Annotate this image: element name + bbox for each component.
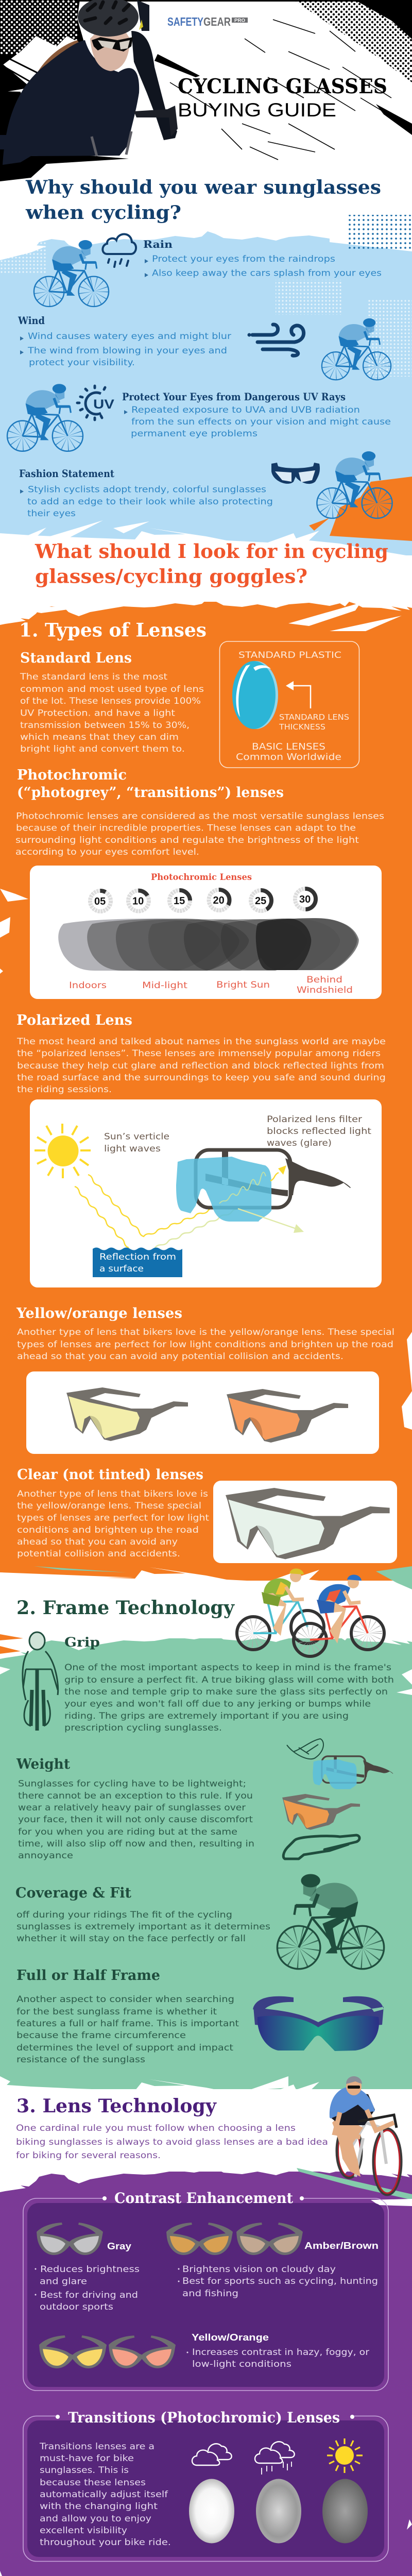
panel: transitions photochromic lenses: Transitions (Photochromic) Lenses bbox=[68, 2409, 340, 2426]
rain item: Rain bbox=[143, 238, 173, 250]
clear lens text: types of lenses are perfect for low light bbox=[17, 1513, 210, 1523]
coverage and fit bbox=[15, 1874, 384, 1969]
clear lens text: conditions and brighten up the road bbox=[17, 1525, 199, 1535]
panel: photochromic lenses chart: Photochromic Lenses bbox=[151, 872, 252, 883]
full or half frame: features a full or half frame. This is important bbox=[16, 2019, 239, 2028]
coverage and fit: Coverage & Fit bbox=[15, 1885, 132, 1901]
yellow/orange lens text: Another type of lens that bikers love is the yellow/orange lens. These special bbox=[17, 1327, 394, 1337]
logo: Safety Gear Pro: PRO bbox=[234, 18, 245, 23]
full or half frame: for the best sunglass frame is whether it bbox=[16, 2007, 217, 2016]
title: CYCLING GLASSES bbox=[178, 75, 387, 98]
panel: polarized lens diagram: Polarized lens filter bbox=[267, 1114, 362, 1124]
title bbox=[178, 75, 387, 121]
panel: contrast enhancement: Best for sports such as cycling, hunting bbox=[182, 2276, 378, 2286]
yellow/orange lens text bbox=[16, 1306, 394, 1361]
photochromic text: surrounding light conditions and regulate the brightness of the light bbox=[15, 835, 359, 845]
weight text: your face, then it will not only cause discomfort bbox=[18, 1815, 253, 1824]
polarized lens text: Polarized Lens bbox=[16, 1012, 132, 1028]
illustration: two cartoon cyclists bbox=[237, 1568, 384, 1656]
dial row: exposure seconds: 10 bbox=[132, 896, 144, 907]
coverage and fit: sunglasses is extremely important as it determines bbox=[16, 1922, 270, 1931]
panel: green frame section background bbox=[0, 1615, 412, 2089]
heading: what to look for bbox=[35, 540, 388, 587]
photochromic text: Photochromic lenses are considered as the most versatile sunglass lenses bbox=[16, 811, 384, 821]
panel: yellow and orange glasses bbox=[26, 1371, 379, 1454]
full or half frame: Another aspect to consider when searching bbox=[16, 1994, 234, 2004]
heading: why wear sunglasses bbox=[25, 177, 381, 224]
dial row: exposure seconds bbox=[90, 889, 316, 911]
white band under blue section bbox=[0, 520, 412, 611]
section heading: lens technology: 3. Lens Technology bbox=[16, 2095, 217, 2117]
heading: what to look for: glasses/cycling goggles? bbox=[35, 565, 307, 587]
wind item: Wind causes watery eyes and might blur bbox=[28, 331, 231, 341]
logo: Safety Gear Pro: GEAR bbox=[203, 15, 231, 28]
goggles illustration bbox=[176, 1150, 351, 1222]
panel: polarized lens diagram bbox=[30, 1099, 382, 1287]
rain item: Protect your eyes from the raindrops bbox=[152, 254, 335, 264]
wind item: The wind from blowing in your eyes and bbox=[27, 346, 227, 355]
section heading: lens technology: biking sunglasses is always to avoid glass lenses are a bad idea bbox=[16, 2137, 328, 2147]
panel: contrast enhancement: Yellow/Orange bbox=[192, 2332, 269, 2343]
section heading: frame technology: 2. Frame Technology bbox=[16, 1597, 235, 1619]
weight text: annoyance bbox=[18, 1851, 73, 1860]
polarized lens text bbox=[16, 1012, 386, 1094]
standard lens text: bright light and convert them to. bbox=[20, 744, 185, 754]
weight text: wear a relatively heavy pair of sunglasses over bbox=[18, 1803, 246, 1812]
panel: polarized lens diagram: light waves bbox=[104, 1144, 161, 1154]
icon: reflection surface: Reflection from bbox=[99, 1252, 176, 1262]
dial row: exposure seconds: 05 bbox=[94, 896, 106, 907]
overlapping lens tints bbox=[58, 918, 359, 971]
fashion statement item bbox=[19, 451, 412, 541]
clear lens text: the yellow/orange lens. These special bbox=[17, 1501, 201, 1511]
weight text: there cannot be an exception to this rule. If you bbox=[18, 1791, 253, 1801]
panel: contrast enhancement: and glare bbox=[40, 2277, 87, 2286]
bike: teal frame bbox=[237, 1601, 324, 1650]
UV protection item: Repeated exposure to UVA and UVB radiation bbox=[131, 405, 360, 415]
section heading: types of lenses: 1. Types of Lenses bbox=[19, 619, 207, 641]
yellow/orange lens text: Yellow/orange lenses bbox=[16, 1306, 182, 1321]
yellow/orange lens text: types of lenses are perfect for low light conditions and brighten up the road bbox=[17, 1340, 393, 1349]
panel: orange lens section background bbox=[0, 581, 412, 1581]
panel: polarized lens diagram: waves (glare) bbox=[267, 1138, 332, 1148]
grip text and icon: prescription cycling sunglasses. bbox=[64, 1723, 222, 1733]
illustration: cyclist in blue jersey bbox=[330, 2076, 401, 2195]
clear lens text: Another type of lens that bikers love is bbox=[17, 1489, 208, 1499]
heading: why wear sunglasses: Why should you wear sunglasses bbox=[25, 177, 381, 198]
fashion statement item: their eyes bbox=[27, 509, 76, 518]
panel: transitions photochromic lenses: sunglasses. This is bbox=[40, 2465, 129, 2475]
standard plastic lens diagram: BASIC LENSES bbox=[252, 741, 325, 752]
panel: photochromic lenses chart: Behind bbox=[306, 975, 342, 985]
dial row: exposure seconds: 25 bbox=[255, 895, 266, 907]
lens tint samples bbox=[189, 2479, 234, 2543]
standard lens text: common and most used type of lens bbox=[20, 684, 204, 694]
heading: what to look for: What should I look for in cycling bbox=[35, 540, 388, 563]
hero background grunge bbox=[0, 0, 412, 181]
icon: reflection surface bbox=[93, 1248, 182, 1277]
dial row: exposure seconds: 20 bbox=[213, 895, 225, 906]
grip text and icon: your eyes and won't fall off due to any jerking or bumps while bbox=[64, 1699, 371, 1709]
icon: gradient sunglasses bbox=[253, 1996, 384, 2051]
fashion statement item: Fashion Statement bbox=[19, 467, 115, 480]
panel: contrast enhancement: Brightens vision on cloudy day bbox=[182, 2264, 336, 2274]
panel: contrast enhancement: Gray bbox=[107, 2241, 131, 2251]
panel: clear lens glasses bbox=[213, 1481, 397, 1563]
dial row: exposure seconds: 30 bbox=[299, 894, 311, 905]
panel: transitions photochromic lenses: excellent visibility bbox=[40, 2526, 127, 2535]
hero photo: cyclist riders bbox=[0, 0, 178, 165]
title: BUYING GUIDE bbox=[178, 99, 336, 121]
standard lens text: The standard lens is the most bbox=[20, 672, 168, 682]
wind item bbox=[18, 314, 391, 380]
weight text: time, will also slip off now and then, resulting in bbox=[18, 1839, 254, 1849]
dial row: exposure seconds: 15 bbox=[174, 895, 185, 907]
grip text and icon: the nose and temple grip to make sure the glass sits perfectly on bbox=[64, 1687, 388, 1697]
icons: feather, blue goggles, orange glasses, hand bbox=[282, 1739, 393, 1859]
section heading: lens technology: One cardinal rule you must follow when choosing a lens bbox=[16, 2123, 296, 2133]
weight text: for you when you are riding but at the same bbox=[18, 1827, 237, 1837]
heading: why wear sunglasses: when cycling? bbox=[25, 202, 181, 224]
panel: transitions photochromic lenses: must-have for bike bbox=[40, 2453, 134, 2463]
panel: photochromic lenses chart: Windshield bbox=[297, 985, 353, 995]
grip text and icon: Grip bbox=[64, 1635, 100, 1650]
standard lens text: transmission between 15% to 30%, bbox=[20, 720, 190, 730]
panel: contrast enhancement bbox=[23, 2190, 388, 2391]
grip text and icon: grip to ensure a perfect fit. A true biking glass will come with both bbox=[64, 1675, 394, 1685]
panel: contrast enhancement: Reduces brightness bbox=[40, 2264, 140, 2274]
weight text bbox=[16, 1756, 254, 1860]
panel: photochromic lenses chart: Bright Sun bbox=[216, 980, 270, 990]
full or half frame: Full or Half Frame bbox=[16, 1968, 160, 1984]
clear lens text: Clear (not tinted) lenses bbox=[17, 1467, 203, 1483]
white band under green section bbox=[0, 2076, 412, 2179]
standard lens text: of the lot. These lenses provide 100% bbox=[20, 696, 201, 706]
full or half frame: determines the level of support and impact bbox=[16, 2043, 234, 2053]
clear lens text: ahead so that you can avoid any bbox=[17, 1537, 178, 1547]
polarized lens text: The most heard and talked about names in the sunglass world are maybe bbox=[16, 1037, 386, 1046]
full or half frame bbox=[16, 1968, 384, 2064]
panel: transitions photochromic lenses: with the changing light bbox=[40, 2501, 158, 2511]
UV protection item bbox=[7, 384, 391, 451]
UV protection item: Protect Your Eyes from Dangerous UV Rays bbox=[122, 391, 346, 403]
standard plastic lens diagram: Common Worldwide bbox=[236, 752, 341, 762]
panel: contrast enhancement: Amber/Brown bbox=[304, 2241, 379, 2251]
standard plastic lens diagram: THICKNESS bbox=[279, 722, 325, 732]
rain item: Also keep away the cars splash from your eyes bbox=[152, 268, 382, 278]
standard plastic lens diagram: STANDARD PLASTIC bbox=[238, 650, 341, 660]
panel: contrast enhancement: outdoor sports bbox=[40, 2302, 113, 2312]
panel: polarized lens diagram: Sun’s verticle bbox=[104, 1131, 169, 1142]
grip text and icon bbox=[23, 1632, 394, 1733]
UV protection item: UV bbox=[93, 397, 114, 412]
weight text: Sunglasses for cycling have to be lightweight; bbox=[18, 1778, 246, 1789]
polarized lens text: because they help cut glare and reflection and block reflected lights from bbox=[17, 1061, 384, 1071]
weight text: Weight bbox=[16, 1756, 71, 1772]
panel: photochromic lenses chart bbox=[30, 866, 382, 999]
panel: transitions photochromic lenses bbox=[23, 2409, 388, 2562]
white band under orange section bbox=[0, 1566, 412, 1653]
icon: sun bbox=[35, 1124, 91, 1178]
panel: contrast enhancement: Contrast Enhancement bbox=[114, 2190, 293, 2207]
polarized lens text: the “polarized lenses”. These lenses are immensely popular among riders bbox=[17, 1048, 381, 1058]
bike: red frame bbox=[294, 1606, 384, 1656]
lens swatches bbox=[37, 2223, 303, 2368]
logo: Safety Gear Pro: SAFETY bbox=[167, 15, 203, 28]
light waves bbox=[75, 1175, 238, 1248]
panel: contrast enhancement: Increases contrast in hazy, foggy, or bbox=[192, 2347, 369, 2357]
panel: transitions photochromic lenses: Transitions lenses are a bbox=[39, 2442, 154, 2451]
standard lens text bbox=[20, 650, 204, 754]
panel: transitions photochromic lenses: and allow you to enjoy bbox=[40, 2514, 151, 2523]
clear lens text: potential collision and accidents. bbox=[17, 1549, 180, 1558]
fashion statement item: Stylish cyclists adopt trendy, colorful sunglasses bbox=[28, 484, 266, 495]
weather icons bbox=[192, 2442, 295, 2475]
logo: Safety Gear Pro bbox=[167, 15, 248, 28]
grip text and icon: One of the most important aspects to keep in mind is the frame's bbox=[64, 1663, 391, 1672]
section heading: lens technology: for biking for several reasons. bbox=[16, 2150, 161, 2160]
panel: photochromic lenses chart: Indoors bbox=[69, 980, 107, 990]
photochromic text: (“photogrey”, “transitions”) lenses bbox=[17, 785, 284, 801]
panel: contrast enhancement: low-light conditions bbox=[192, 2359, 291, 2369]
panel: why section blue background bbox=[0, 214, 412, 555]
yellow/orange lens text: ahead so that you can avoid any potential collision and accidents. bbox=[17, 1351, 344, 1361]
photochromic text: Photochromic bbox=[17, 767, 127, 783]
coverage and fit: off during your ridings The fit of the cycling bbox=[16, 1910, 232, 1920]
clear lens text bbox=[17, 1467, 210, 1558]
standard plastic lens diagram: STANDARD LENS bbox=[279, 713, 349, 722]
full or half frame: because the frame circumference bbox=[16, 2030, 186, 2040]
coverage and fit: whether it will stay on the face perfectly or fall bbox=[16, 1934, 246, 1943]
wind item: protect your visibility. bbox=[29, 358, 135, 367]
standard lens text: which means that they can dim bbox=[20, 732, 179, 742]
icon: dark green cyclist bbox=[277, 1874, 384, 1969]
photochromic text: because of their incredible properties. These lenses can adapt to the bbox=[16, 823, 356, 833]
panel: transitions photochromic lenses: because these lenses bbox=[40, 2478, 146, 2487]
panel: purple lens technology section background bbox=[0, 2148, 412, 2576]
rain item bbox=[34, 234, 382, 307]
panel: contrast enhancement: Best for driving and bbox=[40, 2290, 138, 2300]
standard lens text: UV Protection. and have a light bbox=[20, 708, 176, 718]
polarized lens text: the road surface and the surroundings to keep you safe and sound during bbox=[17, 1073, 386, 1082]
wind item: Wind bbox=[18, 314, 45, 327]
standard plastic lens diagram bbox=[219, 641, 359, 768]
panel: photochromic lenses chart: Mid-light bbox=[142, 980, 188, 990]
standard lens text: Standard Lens bbox=[20, 650, 132, 666]
photochromic text bbox=[15, 767, 384, 857]
icon: front view cyclist bbox=[23, 1632, 58, 1731]
fashion statement item: to add an edge to their look while also protecting bbox=[27, 497, 273, 506]
UV protection item: from the sun effects on your vision and might cause bbox=[131, 417, 391, 427]
photochromic text: according to your eyes comfort level. bbox=[15, 847, 199, 857]
panel: contrast enhancement: and fishing bbox=[182, 2289, 238, 2298]
icon: reflection surface: a surface bbox=[99, 1264, 144, 1274]
polarized lens text: the riding sessions. bbox=[17, 1084, 112, 1094]
UV protection item: permanent eye problems bbox=[131, 429, 258, 438]
grip text and icon: riding. The grips are extremely important if you are using bbox=[64, 1711, 349, 1721]
full or half frame: resistance of the sunglass bbox=[16, 2055, 145, 2064]
panel: transitions photochromic lenses: throughout your bike ride. bbox=[40, 2537, 171, 2547]
panel: polarized lens diagram: blocks reflected light bbox=[267, 1126, 372, 1136]
section heading: lens technology bbox=[16, 2095, 328, 2160]
panel: transitions photochromic lenses: automatically adjust itself bbox=[40, 2489, 168, 2499]
